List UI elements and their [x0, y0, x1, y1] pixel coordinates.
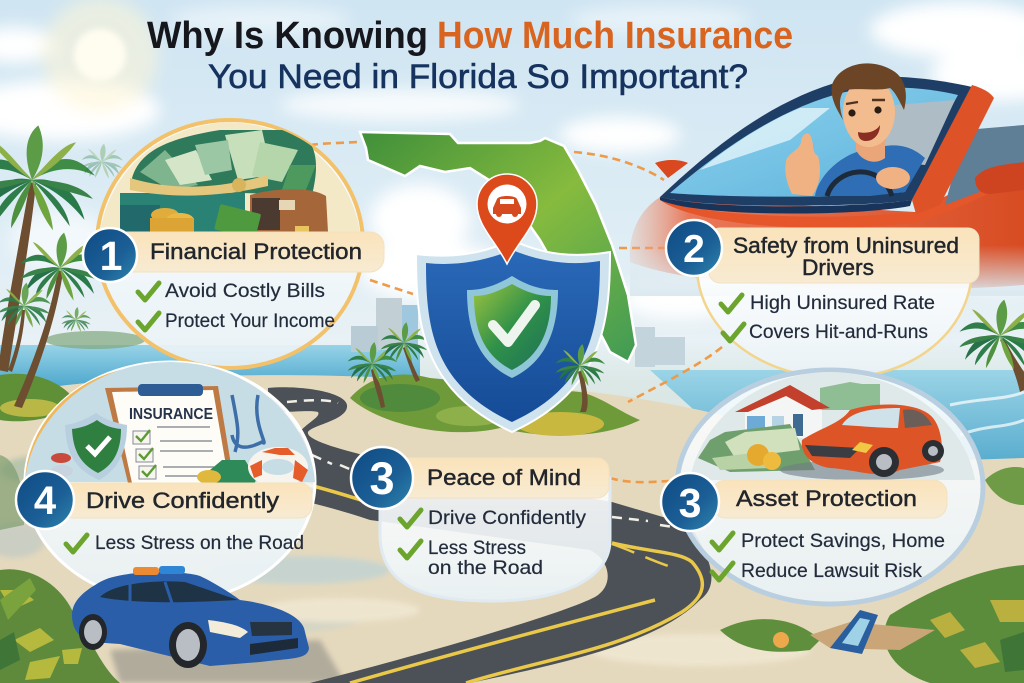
door pillar: [912, 85, 994, 214]
title: [147, 15, 793, 96]
checklist: Covers Hit-and-Runs: [749, 321, 928, 343]
banner: [60, 483, 312, 518]
number badge 2: 2: [683, 228, 705, 271]
number badge 4: 4: [34, 479, 57, 523]
checklist: Less Stress: [428, 537, 526, 559]
panel 2: Safety from Uninsured Drivers: [666, 220, 979, 378]
heading: Financial Protection: [150, 239, 362, 264]
checklist: High Uninsured Rate: [750, 292, 935, 314]
panel 4: Drive Confidently: [16, 362, 315, 602]
windshield: [660, 77, 972, 206]
vegetation: left shore: [0, 331, 145, 530]
wheels: [79, 614, 207, 668]
checklist: Avoid Costly Bills: [165, 280, 325, 302]
blue police car: [72, 566, 309, 668]
heading: Asset Protection: [736, 486, 917, 511]
rear seat area: [945, 125, 1024, 205]
panel 1: Financial Protection: [83, 120, 384, 368]
location pin with car: [477, 174, 537, 264]
shirt: [815, 145, 925, 196]
title: You Need in Florida So Important?: [208, 58, 748, 96]
hair: [832, 63, 906, 120]
stethoscope: [232, 395, 264, 452]
panel: Peace of Mind: [351, 447, 610, 601]
checklist: [712, 530, 945, 582]
illustration: insurance clipboard: [25, 362, 315, 487]
thumbs-up hand: [785, 133, 820, 196]
vegetation: right shore: [985, 467, 1024, 505]
checklist: Drive Confidently: [428, 507, 586, 529]
heading: Safety from Uninsured: [733, 233, 959, 258]
vegetation: center island: [350, 374, 640, 436]
Florida map: [360, 132, 636, 362]
check mark: [493, 305, 535, 342]
heading: [733, 233, 959, 280]
left mirror: [655, 160, 688, 178]
number badge 3: 3: [679, 480, 701, 526]
central shield: [416, 240, 610, 432]
right mirror: [975, 162, 1024, 194]
plants bottom right: [720, 565, 1024, 683]
number badge 1: [83, 228, 137, 282]
title: How Much Insurance: [437, 15, 793, 57]
checklist: Less Stress on the Road: [95, 532, 304, 554]
number badge 2: [666, 220, 722, 276]
neck: [856, 135, 885, 162]
life ring: [248, 447, 308, 482]
number badge 1: 1: [100, 233, 122, 279]
sea left: [0, 345, 420, 388]
number badge 4: [16, 471, 74, 529]
clipboard: INSURANCE: [129, 406, 213, 423]
convertible car with driver: [630, 63, 1024, 296]
inner green shield: [467, 276, 558, 378]
illustration: house, money and car: [690, 372, 975, 480]
road: [268, 387, 711, 683]
checklist: [721, 292, 935, 343]
clipboard: [105, 384, 234, 483]
banner: [395, 458, 609, 498]
dashed connector lines: [310, 142, 722, 482]
plants bottom left: [0, 569, 120, 683]
steering wheel: [827, 172, 892, 196]
title: Why Is Knowing: [147, 15, 428, 57]
palm trees: [0, 125, 1024, 408]
sun: [42, 0, 158, 113]
smile: [858, 125, 880, 141]
phone and papers: [810, 610, 935, 654]
driver: [785, 63, 925, 196]
right hand: [876, 167, 910, 189]
banner: [712, 480, 947, 518]
banner: [100, 232, 384, 272]
checklist: Reduce Lawsuit Risk: [741, 560, 922, 582]
banner: [709, 228, 979, 283]
eyes: [848, 109, 856, 117]
car body: [630, 160, 1024, 296]
heading: Drive Confidently: [86, 488, 279, 513]
illustration: money and briefcase: [100, 122, 360, 239]
checklist: [138, 280, 335, 332]
heading: Drivers: [802, 255, 874, 280]
palm by shield: [556, 344, 605, 412]
checklist: [400, 507, 586, 579]
small shield: [65, 413, 127, 480]
gravel under car: [110, 640, 345, 683]
number badge 3: [661, 473, 719, 531]
number badge 3: 3: [369, 453, 395, 504]
skyline buildings left: [351, 298, 418, 352]
head: [843, 77, 895, 147]
checklist: on the Road: [428, 557, 543, 579]
heading: Peace of Mind: [427, 465, 581, 490]
checklist: Protect Your Income: [165, 310, 335, 332]
number badge 3: [351, 447, 413, 509]
panel: Asset Protection: [661, 370, 983, 604]
money and coins: [208, 460, 256, 483]
sea right: [650, 370, 1024, 470]
checklist: Protect Savings, Home: [741, 530, 945, 552]
skyline buildings right: [635, 327, 685, 367]
